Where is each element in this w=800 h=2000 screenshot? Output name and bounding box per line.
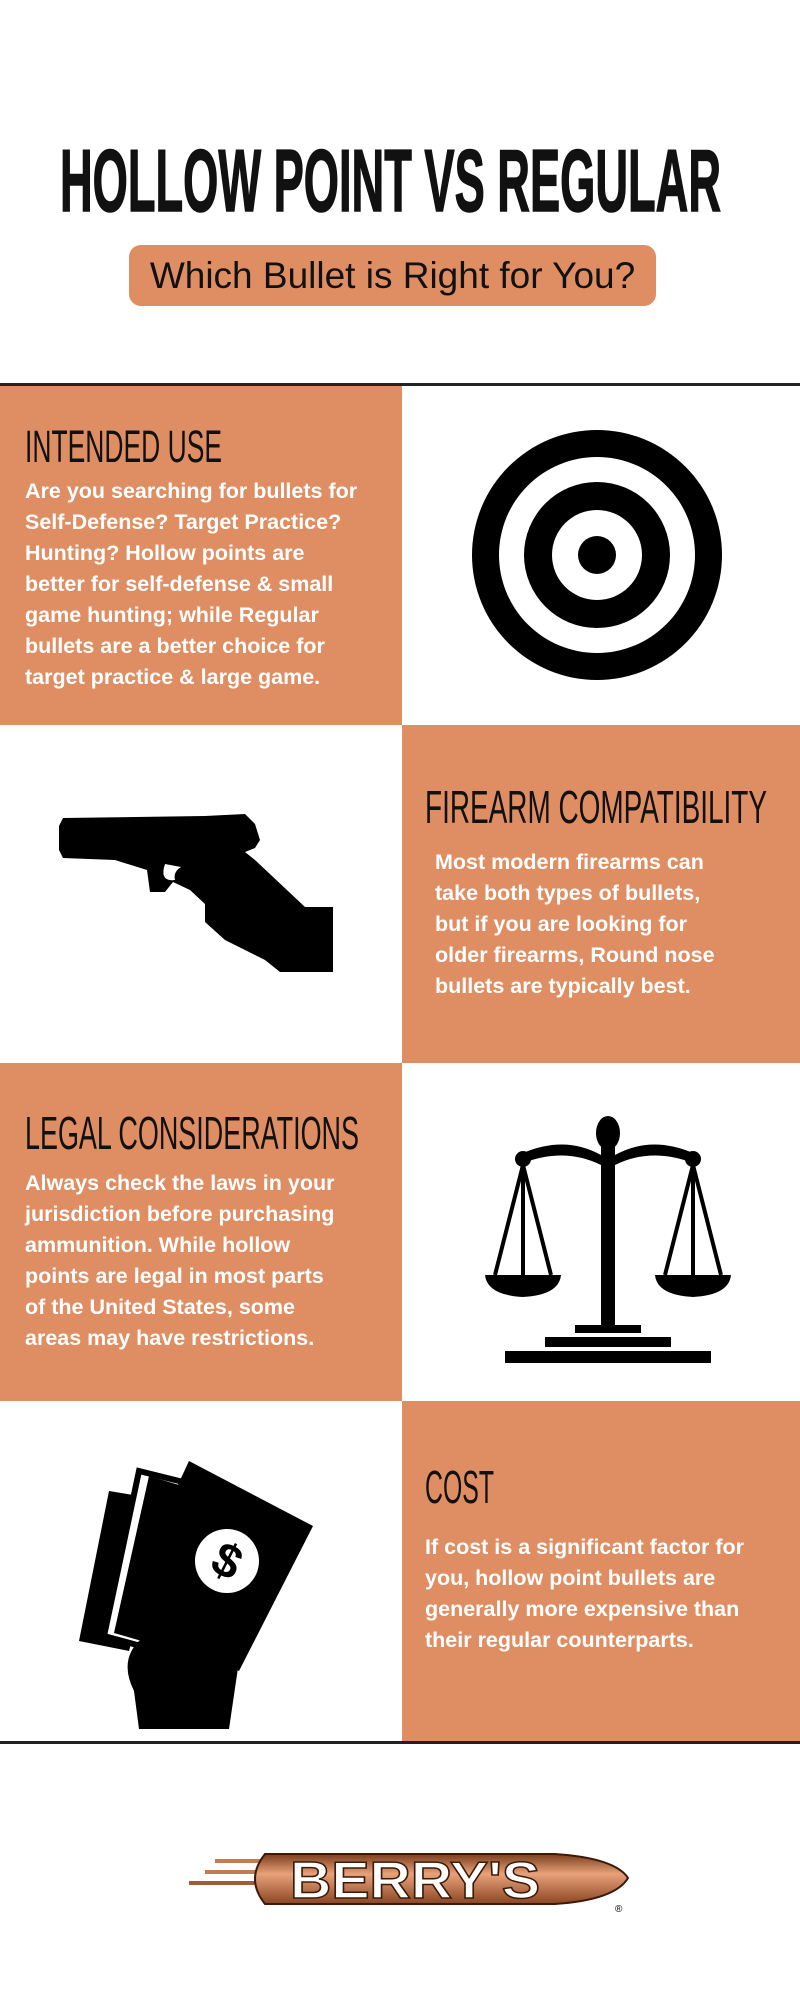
text: intended use: target practice & large game. (25, 665, 320, 689)
text: legal considerations (24, 1171, 334, 1350)
text: intended use: Hunting? Hollow points are (25, 541, 304, 565)
logo: Berry's bullet (189, 1852, 630, 1914)
icon: pistol (59, 814, 333, 972)
text: intended use: bullets are a better choice for (25, 634, 325, 658)
panel: firearm compatibility (402, 725, 800, 1063)
text: firearm compatibility: bullets are typically best. (435, 974, 691, 998)
text: cost: generally more expensive than (425, 1597, 739, 1621)
text: intended use: Self-Defense? Target Practice? (25, 510, 341, 534)
text: firearm compatibility: take both types of bullets, (435, 881, 700, 905)
text: legal considerations: areas may have restrictions. (25, 1326, 314, 1350)
text: cost: If cost is a significant factor for (425, 1535, 744, 1559)
text: intended use (25, 479, 357, 689)
icon: target (472, 430, 722, 680)
icon: scales of justice (485, 1116, 731, 1363)
text: intended use: better for self-defense & small (25, 572, 333, 596)
text: intended use: Are you searching for bullets for (25, 479, 357, 503)
text: legal considerations: of the United States, some (25, 1295, 295, 1319)
text: cost: their regular counterparts. (425, 1628, 694, 1652)
logo: Berry's bullet: BERRY'S (290, 1852, 540, 1910)
text: intended use: game hunting; while Regular (25, 603, 319, 627)
top divider (0, 383, 800, 386)
text: firearm compatibility (435, 850, 715, 998)
subtitle pill (129, 245, 656, 306)
text: legal considerations: jurisdiction before purchasing (25, 1202, 334, 1226)
text: firearm compatibility: but if you are looking for (435, 912, 687, 936)
text: firearm compatibility: older firearms, Round nose (435, 943, 715, 967)
text: cost: you, hollow point bullets are (425, 1566, 715, 1590)
panel: intended use (0, 386, 402, 725)
subtitle pill: Which Bullet is Right for You? (150, 255, 635, 296)
bottom divider (0, 1741, 800, 1744)
heading: intended use: INTENDED USE (25, 421, 222, 472)
icon: money in hand: $ (203, 1532, 251, 1591)
panel: cost (402, 1401, 800, 1741)
text: cost (425, 1535, 744, 1652)
panel: legal considerations (0, 1063, 402, 1401)
text: legal considerations: Always check the laws in your (25, 1171, 334, 1195)
text: legal considerations: points are legal in most parts (25, 1264, 324, 1288)
text: firearm compatibility: Most modern firearms can (435, 850, 704, 874)
text: legal considerations: ammunition. While hollow (25, 1233, 290, 1257)
icon: money in hand (79, 1461, 313, 1729)
